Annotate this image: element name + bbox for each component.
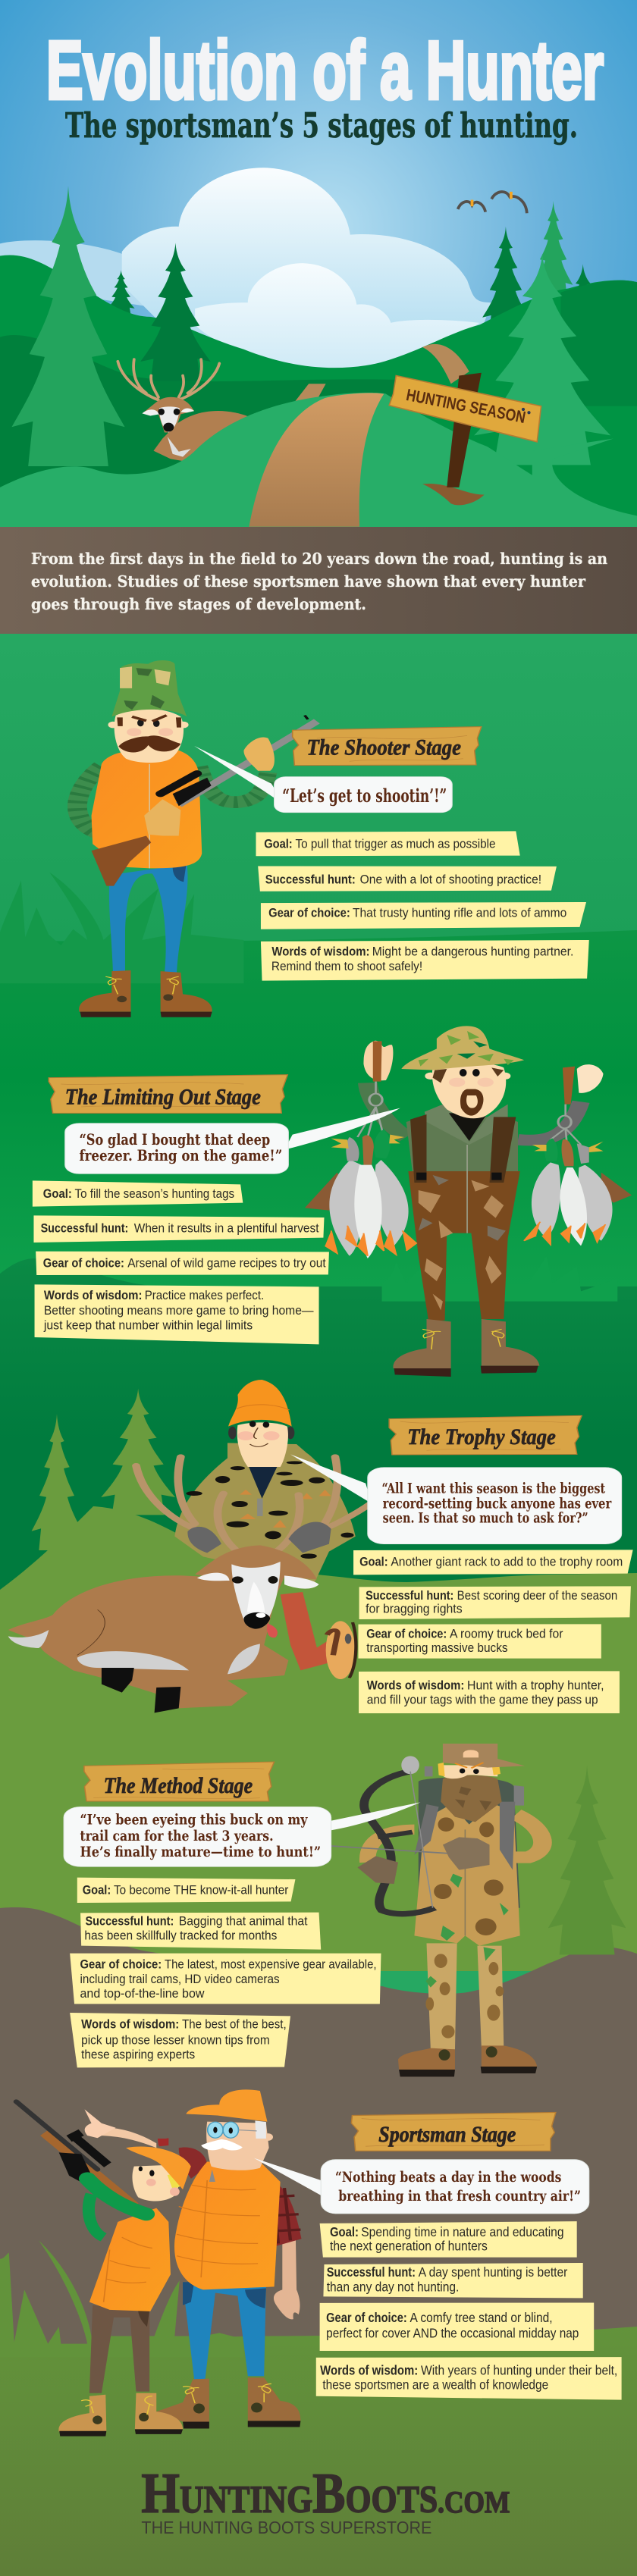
hill: foreground xyxy=(0,393,637,528)
callout: goal: To pull that trigger as much as possible xyxy=(295,837,496,851)
callout: words of wisdom: The best of the best, xyxy=(182,2017,287,2031)
panel: trophy stage xyxy=(8,1380,633,1713)
callout: gear of choice: Gear of choice: xyxy=(43,1255,124,1270)
road xyxy=(249,393,384,527)
callout: goal: Goal: xyxy=(330,2225,359,2239)
callout: goal: the next generation of hunters xyxy=(330,2239,488,2254)
callout: successful hunt: Successful hunt: xyxy=(265,873,356,887)
sign: the shooter stage xyxy=(293,727,482,766)
landscape illustration xyxy=(0,168,637,528)
logo: huntingboots.com: HUNTINGBOOTS.COM xyxy=(141,2462,510,2524)
panel: sportsman stage xyxy=(0,2089,622,2537)
callout: words of wisdom xyxy=(359,1671,620,1713)
callout: successful hunt: A day spent hunting is better xyxy=(419,2265,568,2280)
sign: hunting season: HUNTING SEASON xyxy=(405,385,527,427)
speech bubble xyxy=(254,2158,589,2214)
callout: gear of choice: Gear of choice: xyxy=(326,2311,407,2325)
callout: words of wisdom xyxy=(261,940,589,981)
speech bubble: freezer. Bring on the game!” xyxy=(79,1147,282,1164)
speech bubble: He’s finally mature—time to hunt!” xyxy=(80,1844,321,1860)
callout: gear of choice: Gear of choice: xyxy=(366,1626,447,1641)
callout: goal: Goal: xyxy=(43,1186,72,1201)
callout: successful hunt xyxy=(258,866,557,892)
callout: successful hunt: Bagging that animal that xyxy=(179,1913,308,1928)
cloud xyxy=(122,168,491,369)
trees xyxy=(32,1389,175,1550)
panel: limiting out stage xyxy=(33,1026,632,1377)
callout: goal: To fill the season’s hunting tags xyxy=(75,1186,234,1201)
deer: trophy buck xyxy=(8,1545,356,1713)
speech bubble xyxy=(194,746,452,813)
callout: successful hunt xyxy=(33,1215,324,1243)
panel: shooter stage xyxy=(0,660,589,1017)
background: layered hills xyxy=(0,634,637,2576)
callout: gear of choice xyxy=(36,1252,329,1275)
callout: successful hunt: When it results in a plentiful harvest xyxy=(134,1221,319,1235)
ducks: left string xyxy=(305,1082,416,1258)
callout: successful hunt: Successful hunt: xyxy=(366,1587,453,1603)
callout: goal xyxy=(353,1550,633,1575)
callout: gear of choice xyxy=(320,2302,594,2351)
sign: sportsman stage xyxy=(351,2112,556,2151)
ducks: right string xyxy=(524,1105,632,1246)
grass xyxy=(0,873,243,983)
callout: gear of choice: A comfy tree stand or blind, xyxy=(410,2311,553,2325)
panel: intro band: From the first days in the field to 20 years down the road, hunting is an xyxy=(31,550,607,568)
callout: successful hunt: has been skillfully tracked for months xyxy=(84,1928,277,1942)
callout: goal xyxy=(320,2221,577,2258)
character: trophy hunter xyxy=(136,1380,378,1582)
speech bubble: trail cam for the last 3 years. xyxy=(80,1828,274,1844)
character: boy xyxy=(16,2101,191,2437)
callout: words of wisdom: Better shooting means more game to bring home— xyxy=(44,1302,314,1318)
callout: gear of choice: and top-of-the-line bow xyxy=(80,1985,205,2001)
callout: words of wisdom xyxy=(316,2357,622,2400)
callout: words of wisdom: Remind them to shoot safely! xyxy=(271,959,422,973)
speech bubble xyxy=(64,1802,420,1866)
sign: the limiting out stage: The Limiting Out Stage xyxy=(65,1084,261,1109)
panel: intro band xyxy=(0,527,637,634)
sign: the trophy stage xyxy=(389,1415,582,1455)
speech bubble xyxy=(65,1108,400,1174)
callout: successful hunt: than any day not hunting. xyxy=(327,2280,459,2295)
grass xyxy=(382,1256,617,1302)
callout: words of wisdom: Words of wisdom: xyxy=(320,2364,418,2378)
tree: right xyxy=(474,254,610,465)
tree xyxy=(548,1765,626,1954)
callout: words of wisdom xyxy=(70,2013,290,2067)
callout: goal xyxy=(33,1180,243,1207)
callout: gear of choice: Gear of choice: xyxy=(80,1957,162,1971)
callout: successful hunt: for bragging rights xyxy=(366,1601,463,1615)
sign: the method stage xyxy=(84,1762,275,1801)
callout: goal xyxy=(256,831,520,856)
callout: words of wisdom xyxy=(35,1284,319,1344)
callout: gear of choice: The latest, most expensive gear available, xyxy=(165,1957,377,1971)
tagline: THE HUNTING BOOTS SUPERSTORE xyxy=(141,2518,431,2537)
character: shooter xyxy=(77,660,317,1017)
callout: gear of choice: transporting massive bucks xyxy=(366,1640,508,1655)
callout: words of wisdom: Words of wisdom: xyxy=(81,2017,179,2031)
callout: gear of choice: Gear of choice: xyxy=(268,906,350,920)
sign: the shooter stage: The Shooter Stage xyxy=(306,735,461,760)
birds xyxy=(458,192,527,213)
speech bubble xyxy=(290,1454,622,1544)
speech bubble: “So glad I bought that deep xyxy=(79,1131,270,1149)
callout: successful hunt xyxy=(80,1913,321,1950)
character: method hunter xyxy=(331,1744,542,2076)
sign: the limiting out stage xyxy=(49,1075,287,1113)
callout: goal: To become THE know-it-all hunter xyxy=(114,1882,289,1897)
sign: sportsman stage: Sportsman Stage xyxy=(378,2122,516,2147)
callout: goal: Goal: xyxy=(359,1554,388,1568)
callout: goal: Goal: xyxy=(83,1882,111,1897)
callout: words of wisdom: pick up those lesser known tips from xyxy=(81,2032,270,2047)
callout: goal xyxy=(77,1878,295,1903)
callout: words of wisdom: just keep that number within legal limits xyxy=(43,1318,253,1332)
callout: gear of choice xyxy=(70,1954,381,2004)
callout: words of wisdom: Practice makes perfect. xyxy=(145,1287,264,1302)
callout: successful hunt: Successful hunt: xyxy=(41,1221,128,1235)
callout: successful hunt: Successful hunt: xyxy=(85,1913,174,1928)
callout: words of wisdom: Words of wisdom: xyxy=(367,1678,464,1692)
callout: gear of choice xyxy=(358,1624,601,1659)
grass xyxy=(0,2240,243,2358)
callout: gear of choice xyxy=(261,902,586,929)
callout: gear of choice: including trail cams, HD video cameras xyxy=(80,1971,280,1986)
callout: words of wisdom: these aspiring experts xyxy=(81,2047,195,2061)
callout: successful hunt xyxy=(359,1586,631,1619)
panel: hero sky scene xyxy=(0,0,637,528)
callout: words of wisdom: Words of wisdom: xyxy=(44,1287,142,1302)
deer xyxy=(118,359,248,463)
panel: intro band: evolution. Studies of these sportsmen have shown that every hunter xyxy=(31,572,586,591)
sign: hunting season xyxy=(389,373,541,505)
panel: intro band: goes through five stages of development. xyxy=(31,595,366,613)
callout: gear of choice: Arsenal of wild game recipes to try out xyxy=(127,1255,326,1270)
callout: successful hunt xyxy=(323,2263,583,2298)
character: man xyxy=(84,2089,301,2429)
callout: successful hunt: Successful hunt: xyxy=(327,2265,416,2280)
panel: method stage xyxy=(64,1744,626,2076)
callout: words of wisdom: Words of wisdom: xyxy=(271,944,369,958)
sign: the method stage: The Method Stage xyxy=(104,1772,253,1798)
speech bubble: “I’ve been eyeing this buck on my xyxy=(80,1811,308,1828)
panel: shooter stage: “Let’s get to shootin’!” xyxy=(282,785,447,807)
character: limiting out xyxy=(305,1026,632,1377)
callout: goal: Goal: xyxy=(264,837,293,851)
